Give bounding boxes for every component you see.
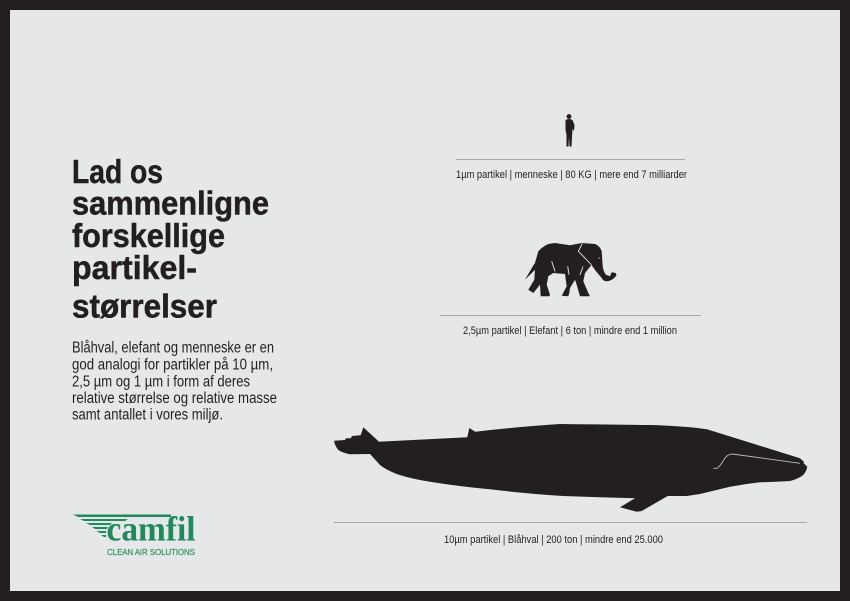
body text: 2,5 µm og 1 µm i form af deres <box>72 374 250 390</box>
label: whale: 10µm partikel | Blåhval | 200 ton | mindre end 25.000 <box>444 534 663 546</box>
body text: Blåhval, elefant og menneske er en <box>72 340 274 356</box>
title <box>72 153 269 324</box>
divider: whale baseline <box>334 522 807 523</box>
logo: camfil <box>73 510 196 557</box>
title: sammenligne <box>72 184 269 222</box>
icon: elephant silhouette <box>525 243 616 296</box>
title: størrelser <box>72 288 217 324</box>
icon: camfil wing <box>73 514 171 537</box>
icon: blue whale silhouette <box>334 424 807 512</box>
divider: elephant baseline <box>440 315 701 316</box>
body text: samt antallet i vores miljø. <box>72 406 223 424</box>
icon: human silhouette <box>566 114 574 146</box>
label: elephant: 2,5µm partikel | Elefant | 6 ton | mindre end 1 million <box>463 325 677 337</box>
body text: relative størrelse og relative masse <box>72 390 277 407</box>
logo wordmark: camfil <box>106 510 196 549</box>
title: Lad os <box>72 153 163 190</box>
body text: god analogi for partikler på 10 µm, <box>72 356 273 374</box>
body text <box>72 340 277 424</box>
title: forskellige <box>72 217 225 254</box>
title: partikel- <box>72 249 197 286</box>
divider: human baseline <box>456 159 685 160</box>
label: human: 1µm partikel | menneske | 80 KG | mere end 7 milliarder <box>456 169 687 181</box>
logo tagline: CLEAN AIR SOLUTIONS <box>107 548 195 557</box>
